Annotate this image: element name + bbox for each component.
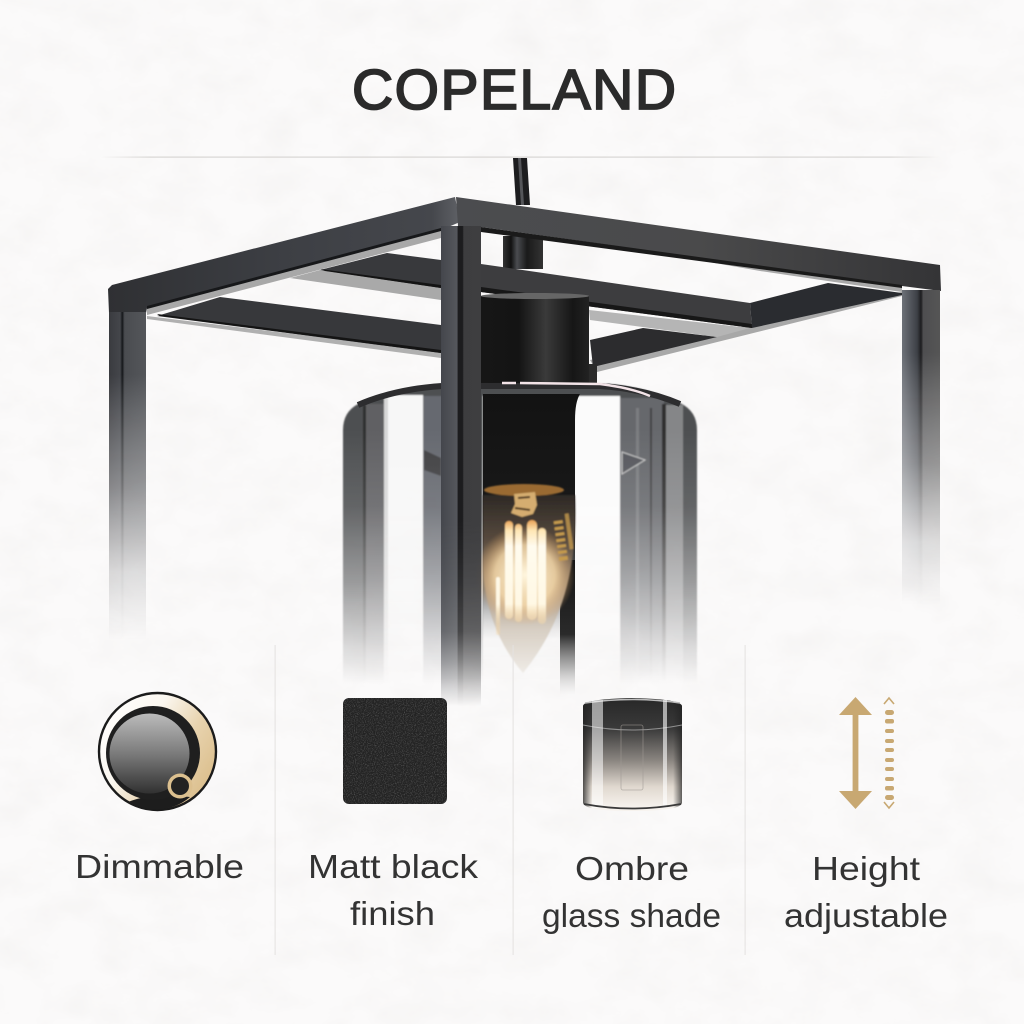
panel: dimmable bbox=[75, 693, 244, 885]
label: matt black finish: Matt black bbox=[308, 848, 479, 885]
divider bbox=[275, 645, 276, 955]
label: ombre glass shade bbox=[542, 850, 721, 934]
panel: ombre glass shade bbox=[542, 698, 721, 934]
label: height adjustable bbox=[784, 850, 948, 934]
icon: dimmer dial bbox=[99, 693, 216, 810]
frame post left bbox=[109, 312, 146, 642]
icon: ombre glass bbox=[583, 698, 682, 811]
icon: height arrow bbox=[839, 697, 894, 809]
label: height adjustable: adjustable bbox=[784, 897, 948, 934]
label: dimmable: Dimmable bbox=[75, 848, 244, 885]
socket bbox=[481, 293, 597, 384]
label: ombre glass shade: Ombre bbox=[575, 850, 689, 887]
divider bbox=[513, 645, 514, 955]
frame post centre bbox=[441, 226, 481, 710]
label: matt black finish bbox=[308, 848, 479, 932]
divider bbox=[745, 645, 746, 955]
rim highlight bbox=[358, 386, 680, 405]
title: COPELAND bbox=[352, 58, 676, 122]
pendant lamp photo bbox=[108, 158, 941, 710]
dark core bbox=[483, 394, 580, 640]
candle bulb bbox=[475, 484, 575, 673]
panel: height adjustable bbox=[784, 697, 948, 934]
label: matt black finish: finish bbox=[350, 895, 435, 932]
icon: matt black swatch bbox=[343, 698, 447, 804]
filaments bbox=[496, 520, 546, 635]
dashed scale bbox=[884, 698, 894, 808]
title rule bbox=[100, 156, 940, 158]
cord bbox=[513, 158, 530, 205]
label: height adjustable: Height bbox=[812, 850, 920, 887]
panel: matt black finish bbox=[308, 698, 479, 932]
frame post right bbox=[902, 290, 940, 610]
back frame bars bbox=[147, 253, 902, 372]
glass shade bbox=[343, 383, 697, 699]
bulb imprint bbox=[553, 513, 575, 561]
top front beam left bbox=[108, 197, 460, 315]
top front beam right bbox=[456, 197, 941, 292]
label: ombre glass shade: glass shade bbox=[542, 897, 721, 934]
ceiling cup bbox=[503, 236, 543, 269]
